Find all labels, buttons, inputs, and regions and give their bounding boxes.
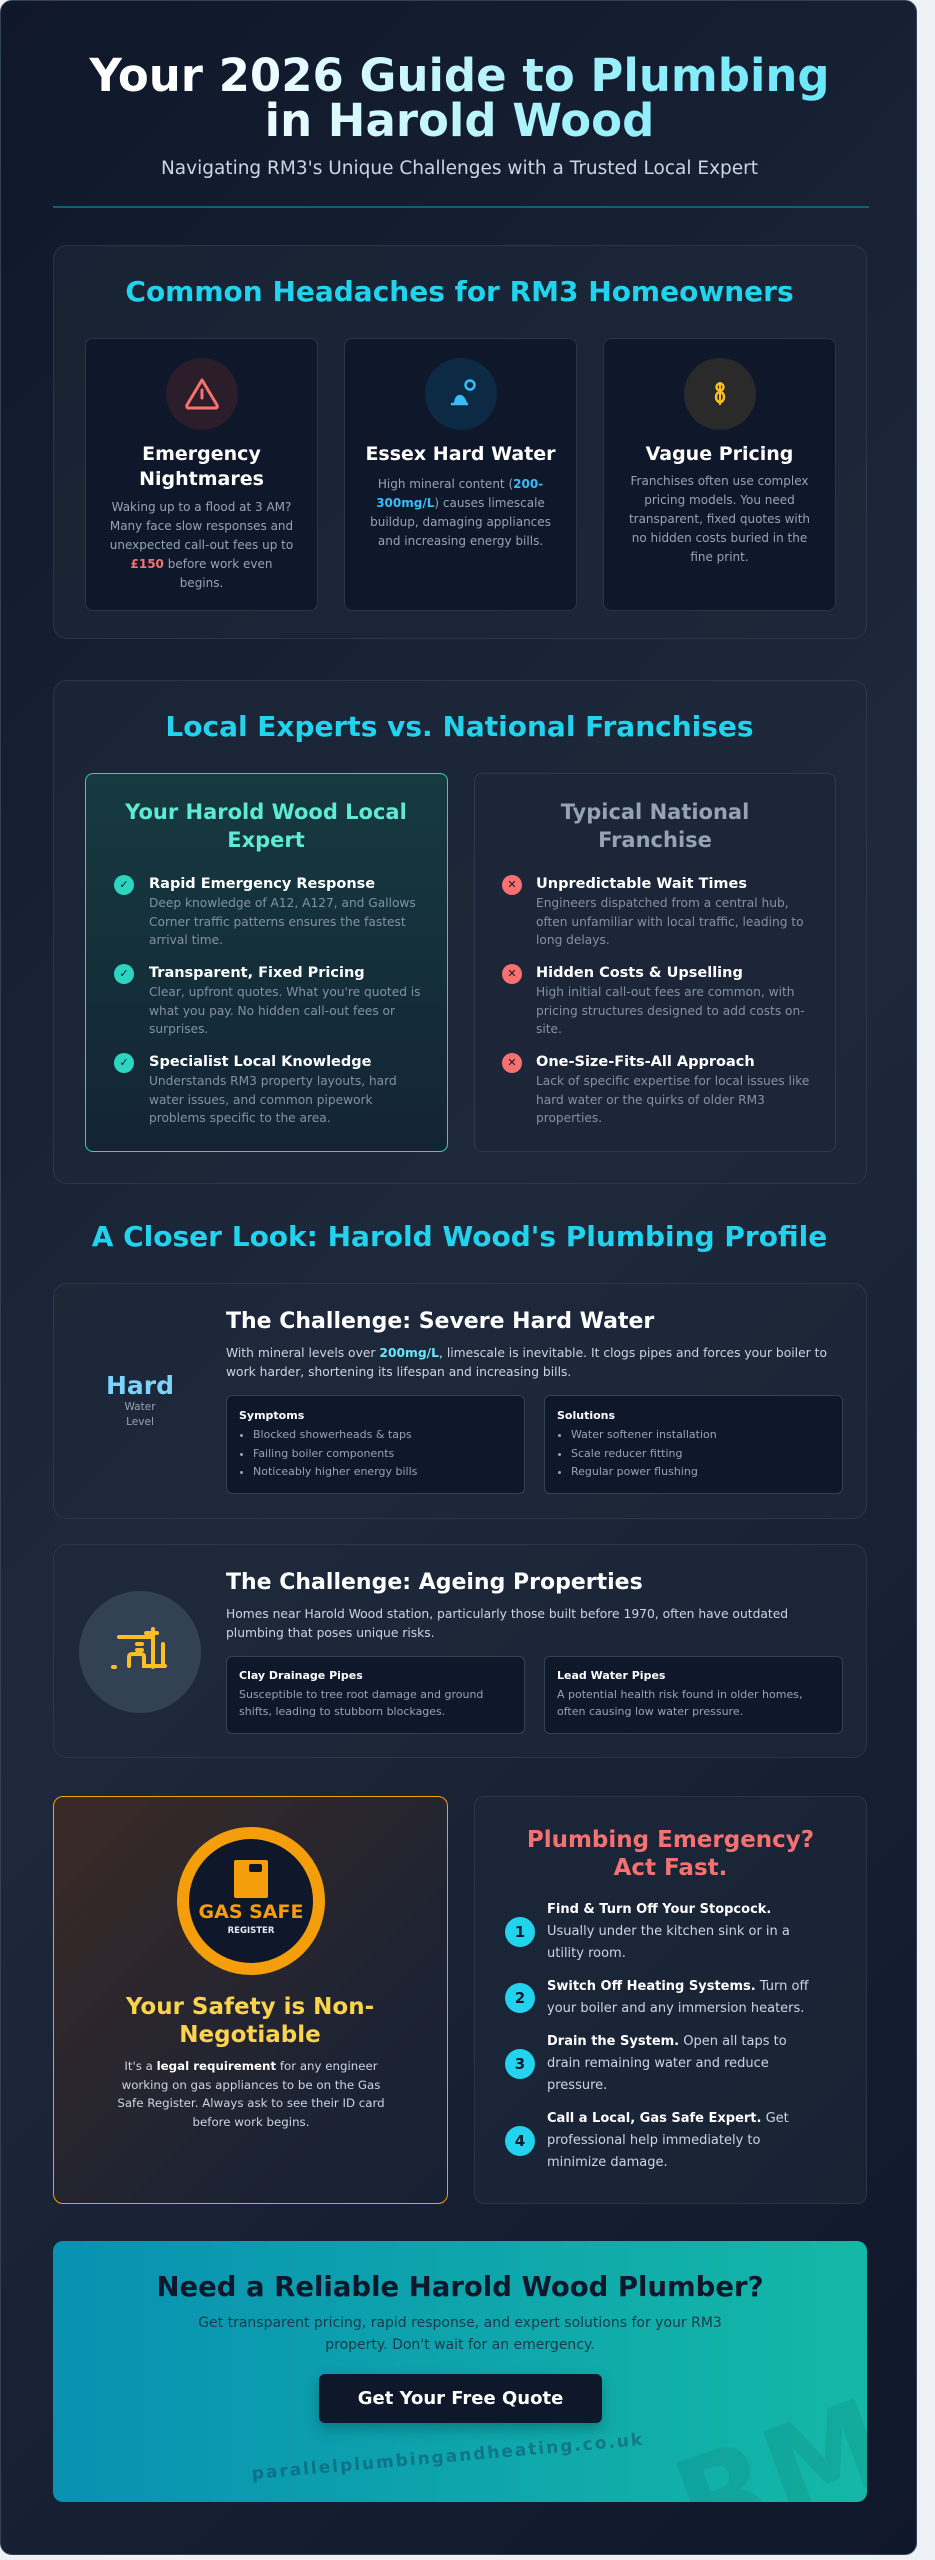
box: clay pipes xyxy=(226,1656,525,1734)
item: hidden costs: Hidden Costs & Upselling xyxy=(536,965,743,981)
panel: emergency steps xyxy=(474,1796,867,2204)
main card: Drain the System. Open all taps to drain remaining water and reduce pressure. xyxy=(547,2034,787,2093)
button xyxy=(319,2374,602,2423)
subcard: national franchise xyxy=(474,773,836,1152)
main card: Switch Off Heating Systems. Turn off your boiler and any immersion heaters. xyxy=(547,1979,808,2016)
gauge: hard water level: Water xyxy=(124,1401,156,1413)
box: lead pipes xyxy=(544,1656,843,1734)
box: lead pipes: Lead Water Pipes xyxy=(557,1669,665,1682)
main card: 1 xyxy=(515,1923,525,1941)
item: wait times: Unpredictable Wait Times xyxy=(536,876,747,892)
heading: local expert xyxy=(125,800,407,852)
heading: emergency xyxy=(527,1827,814,1881)
gauge: hard water level xyxy=(106,1371,174,1428)
title: hard water: The Challenge: Severe Hard Water xyxy=(226,1309,654,1334)
item: rapid response: Deep knowledge of A12, A127, and Gallows Corner traffic patterns ensures the fastest arrival time. xyxy=(149,896,416,947)
panel: common headaches xyxy=(53,245,867,639)
card: emergency nightmares xyxy=(85,338,318,611)
panel: gas safe xyxy=(53,1796,448,2204)
heading: closer look: A Closer Look: Harold Wood's Plumbing Profile xyxy=(92,1220,827,1253)
text: hard water desc: With mineral levels over 200mg/L, limescale is inevitable. It clogs pipes and forces your boiler to work harder, shortening its lifespan and increasing bills. xyxy=(226,1346,827,1379)
text: pricing: Vague Pricing xyxy=(646,443,793,465)
item: local knowledge: Specialist Local Knowledge xyxy=(149,1054,371,1070)
card: vague pricing xyxy=(603,338,836,611)
item: rapid response: Rapid Emergency Response xyxy=(149,876,375,892)
item: one size xyxy=(502,1053,809,1125)
icon: water xyxy=(424,358,496,430)
text: ageing desc: Homes near Harold Wood station, particularly those built before 1970, often have outdated plumbing that poses unique risks. xyxy=(226,1607,788,1640)
icon: old pipes xyxy=(79,1591,201,1713)
item: one size: ✕ xyxy=(507,1056,517,1069)
box: symptoms: Symptoms xyxy=(239,1409,304,1422)
item: fixed pricing: Clear, upfront quotes. What you're quoted is what you pay. No hidden call-out fees or surprises. xyxy=(149,985,421,1036)
main card: 2 xyxy=(515,1989,525,2007)
title: Your 2026 Guide to Plumbing xyxy=(89,49,830,102)
title: safety xyxy=(126,1994,374,2048)
item: wait times xyxy=(502,875,804,947)
card: hard water xyxy=(344,338,577,611)
box: solutions xyxy=(544,1395,843,1494)
button: Get Your Free Quote xyxy=(358,2388,563,2409)
item: rapid response: ✓ xyxy=(119,878,129,891)
text: emergency: Waking up to a flood at 3 AM? Many face slow responses and unexpected call-out fees up to £150 before work even begins. xyxy=(110,500,293,590)
item: wait times: Engineers dispatched from a central hub, often unfamiliar with local traffic, leading to long delays. xyxy=(536,896,804,947)
step 3 xyxy=(505,2034,787,2093)
heading: emergency: Plumbing Emergency? xyxy=(527,1827,814,1853)
text: hard water: High mineral content (200-300mg/L) causes limescale buildup, damaging appliances and increasing energy bills. xyxy=(370,477,551,548)
box: symptoms: Noticeably higher energy bills xyxy=(253,1465,417,1478)
step 2 xyxy=(505,1979,809,2016)
text: pricing: Franchises often use complex pricing models. You need transparent, fixed quotes with no hidden costs buried in the fine print. xyxy=(629,474,810,564)
main card: 4 xyxy=(515,2132,525,2150)
icon: pricing xyxy=(684,358,756,430)
main card: 3 xyxy=(515,2055,525,2073)
item: hidden costs: ✕ xyxy=(507,967,517,980)
box: symptoms xyxy=(226,1395,525,1494)
text: hard water xyxy=(365,443,556,548)
title xyxy=(1,53,918,143)
title: ageing: The Challenge: Ageing Properties xyxy=(226,1570,643,1595)
heading: common headaches: Common Headaches for RM3 Homeowners xyxy=(125,275,794,308)
main card: Call a Local, Gas Safe Expert. Get professional help immediately to minimize damage. xyxy=(547,2111,789,2170)
text: emergency: Emergency Nightmares xyxy=(139,443,264,490)
cta heading: Need a Reliable Harold Wood Plumber? xyxy=(156,2271,764,2303)
icon: gas safe badge: REGISTER xyxy=(228,1926,274,1936)
item: local knowledge: ✓ xyxy=(119,1056,129,1069)
box: clay pipes: Clay Drainage Pipes xyxy=(239,1669,363,1682)
box: solutions: Scale reducer fitting xyxy=(571,1446,682,1460)
heading: national xyxy=(560,800,749,852)
watermark url: parallelplumbingandheating.co.uk xyxy=(251,2430,645,2484)
item: hidden costs xyxy=(502,964,805,1036)
box: solutions: Regular power flushing xyxy=(571,1465,698,1478)
icon: warning xyxy=(166,358,238,430)
item: one size: One-Size-Fits-All Approach xyxy=(536,1054,755,1070)
box: symptoms: Failing boiler components xyxy=(253,1446,394,1460)
item: local knowledge xyxy=(114,1053,397,1125)
item: rapid response xyxy=(114,875,416,947)
box: lead pipes: A potential health risk found in older homes, often causing low water pressure. xyxy=(557,1688,802,1718)
item: local knowledge: Understands RM3 property layouts, hard xyxy=(149,1074,397,1088)
gauge: hard water level: Level xyxy=(126,1416,154,1428)
text: safety desc: It's a legal requirement for any engineer working on gas appliances to be on the Gas Safe Register. Always ask to see their ID card before work begins. xyxy=(117,2059,385,2128)
text: hard water: Essex Hard Water xyxy=(365,443,556,465)
step 1 xyxy=(505,1902,790,1961)
box: clay pipes: Susceptible to tree root damage and ground shifts, leading to stubborn blockages. xyxy=(239,1688,483,1718)
item: fixed pricing: ✓ xyxy=(119,967,129,980)
panel: hard water challenge xyxy=(53,1283,867,1519)
box: symptoms: Blocked showerheads & taps xyxy=(253,1428,412,1441)
box: solutions: Water softener installation xyxy=(571,1428,717,1441)
text: emergency xyxy=(110,443,293,590)
box: solutions: Solutions xyxy=(557,1409,615,1422)
icon: gas safe badge xyxy=(177,1827,325,1975)
title: safety: Your Safety is Non- xyxy=(126,1994,374,2020)
item: fixed pricing: Transparent, Fixed Pricing xyxy=(149,965,365,981)
cta banner xyxy=(53,2241,867,2502)
panel: ageing properties xyxy=(53,1544,867,1758)
item: local knowledge: problems specific to the area. xyxy=(149,1111,331,1125)
item: local knowledge: water issues, and common pipework xyxy=(149,1092,373,1106)
item: one size: Lack of specific expertise for local issues like hard water or the quirks of older RM3 properties. xyxy=(536,1074,809,1125)
gauge: hard water level: Hard xyxy=(106,1371,174,1400)
main card: Find & Turn Off Your Stopcock. Usually under the kitchen sink or in a utility room. xyxy=(547,1902,790,1961)
heading: local vs national: Local Experts vs. National Franchises xyxy=(165,710,754,743)
item: hidden costs: High initial call-out fees are common, with pricing structures designed to add costs on-site. xyxy=(536,985,805,1036)
title: safety: Negotiable xyxy=(179,2022,321,2048)
panel: local vs national xyxy=(53,680,867,1184)
heading: local expert: Your Harold Wood Local xyxy=(125,800,407,824)
icon: gas safe badge: GAS SAFE xyxy=(199,1901,303,1923)
step 4 xyxy=(505,2111,789,2170)
item: wait times: ✕ xyxy=(507,878,517,891)
heading: emergency: Act Fast. xyxy=(614,1855,727,1881)
cta text: Get transparent pricing, rapid response, and expert solutions for your RM3 property. Don't wait for an emergency. xyxy=(198,2315,722,2353)
subcard: local expert xyxy=(85,773,448,1152)
subtitle: Navigating RM3's Unique Challenges with a Trusted Local Expert xyxy=(161,158,758,179)
heading: national: Typical National xyxy=(561,800,749,824)
item: fixed pricing xyxy=(114,964,421,1036)
title: in Harold Wood xyxy=(265,94,654,147)
heading: local expert: Expert xyxy=(227,828,305,852)
heading: national: Franchise xyxy=(598,828,712,852)
